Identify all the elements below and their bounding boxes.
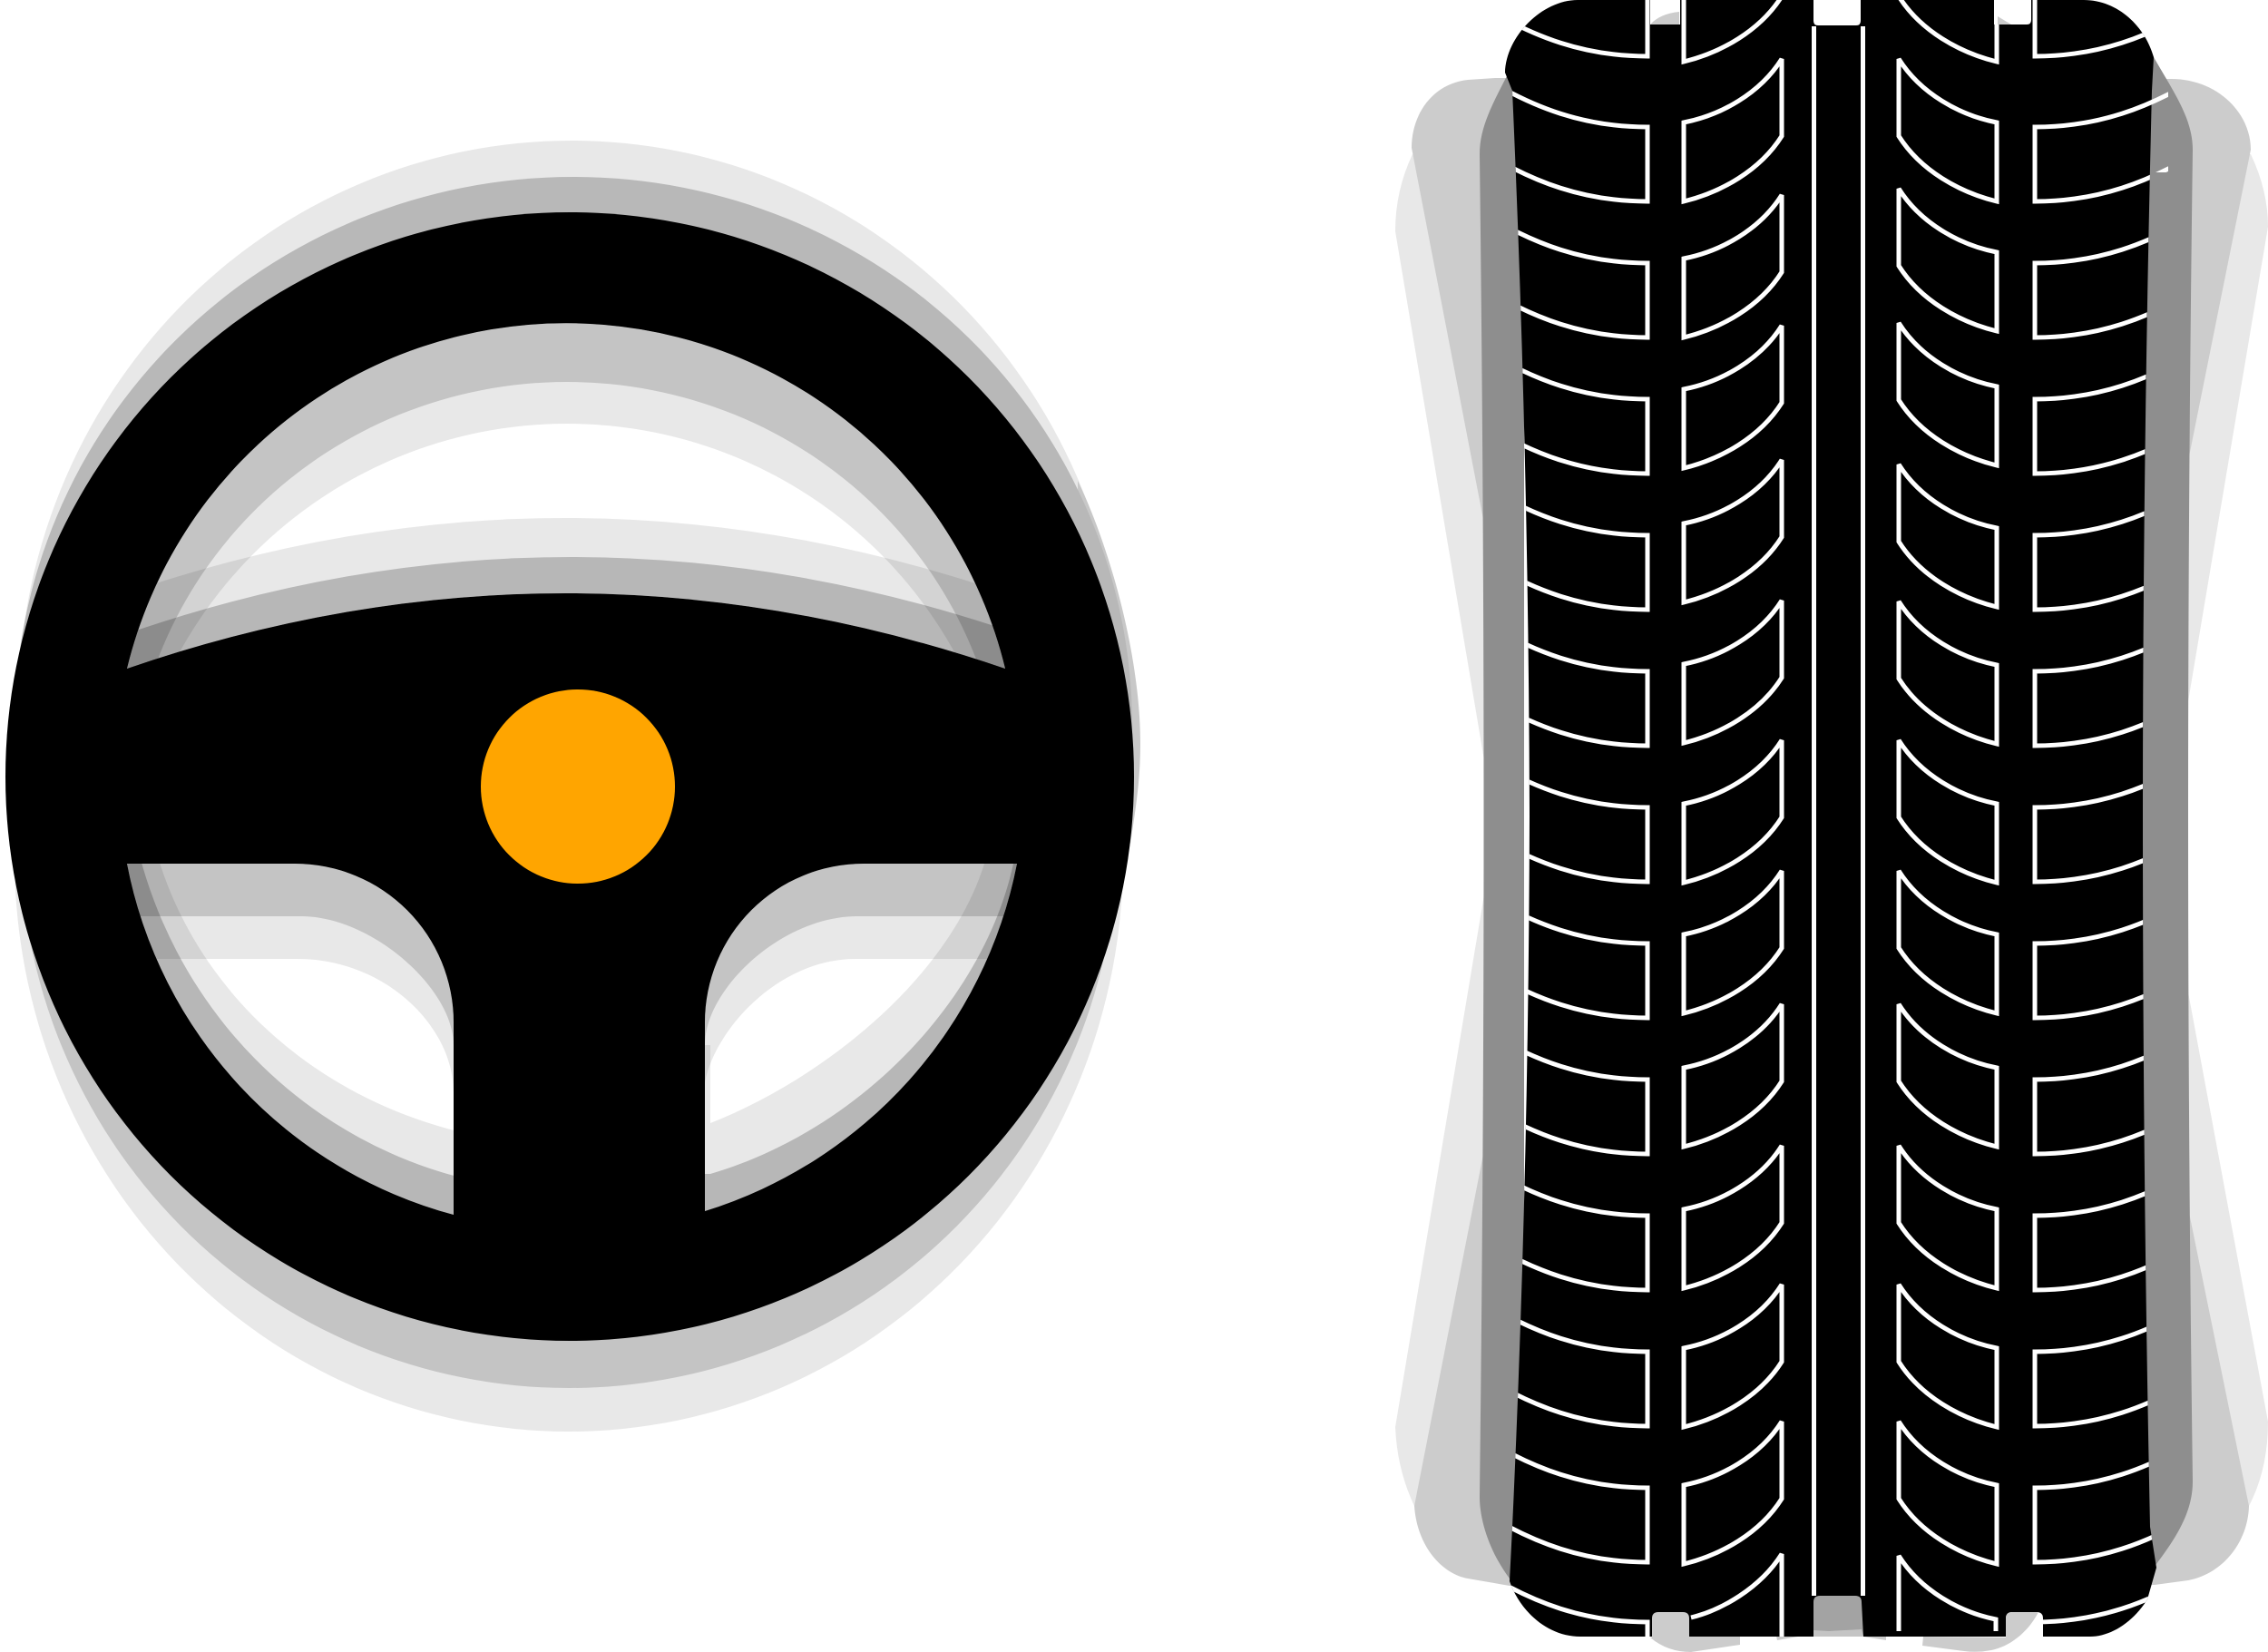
centre groove lines <box>1812 26 1865 1596</box>
tread: left outer blocks <box>1511 0 1649 1637</box>
upper window <box>127 323 1005 669</box>
tyre shadow layers <box>1395 57 2268 1640</box>
lower right window <box>705 864 1017 1211</box>
wheel shadow layers <box>15 141 1140 1432</box>
tread: right outer blocks <box>2032 0 2168 1624</box>
wheel rim and spokes <box>5 212 1134 1341</box>
horn button <box>481 689 675 884</box>
tread: left inner blocks <box>1684 0 1782 1638</box>
tread: right inner blocks <box>1899 0 1997 1631</box>
top notches <box>1650 0 2031 25</box>
steering wheel <box>5 141 1140 1432</box>
bottom notches <box>1650 1596 2043 1652</box>
lower left window <box>127 864 454 1215</box>
tyre <box>1395 0 2268 1652</box>
tyre body <box>1505 0 2156 1637</box>
